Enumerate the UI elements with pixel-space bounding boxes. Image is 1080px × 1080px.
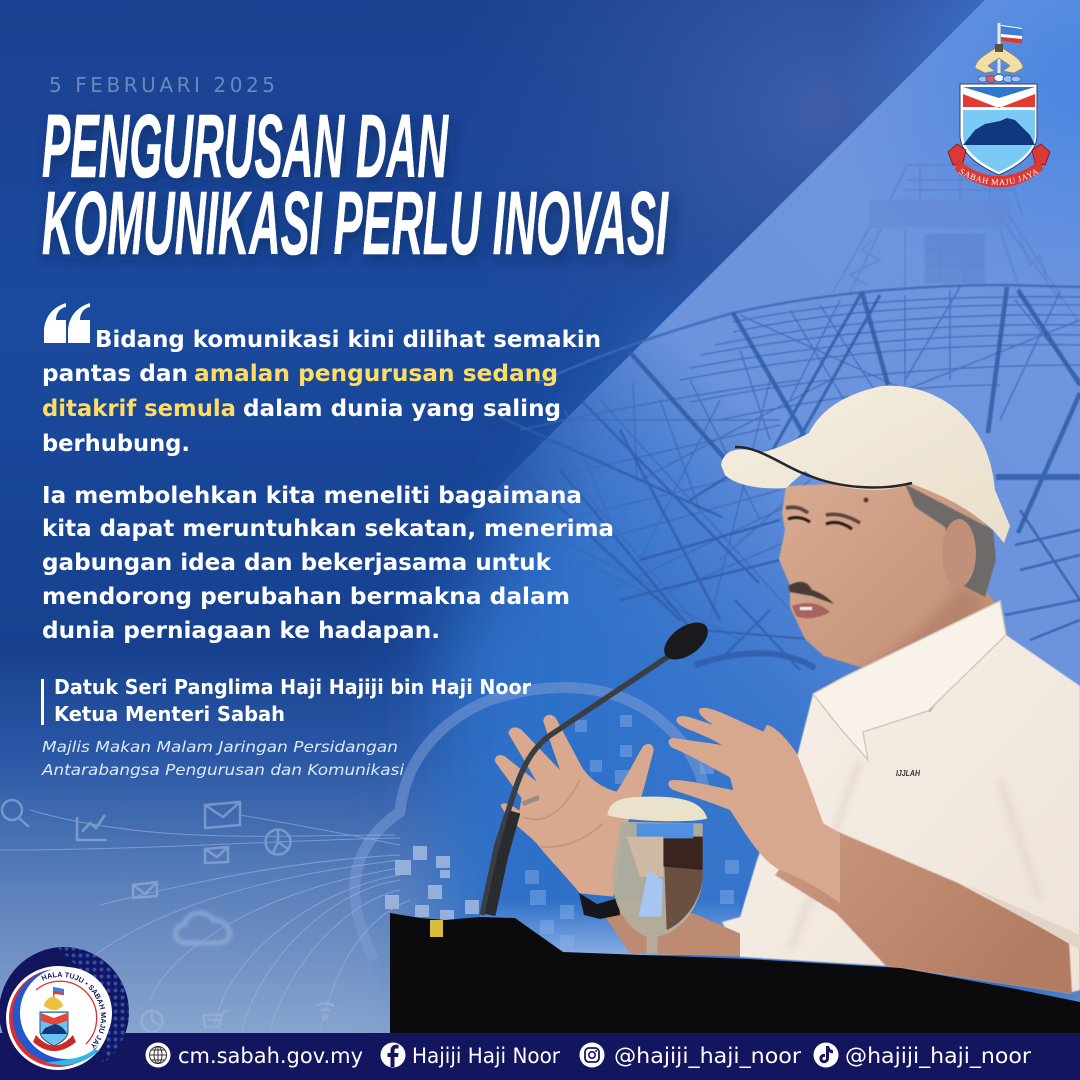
eyes, brow, moustache, mouth xyxy=(786,498,868,618)
quote paragraph two: kita dapat meruntuhkan sekatan, menerima xyxy=(42,516,614,542)
ear xyxy=(942,519,976,587)
shirt folds xyxy=(790,760,1040,950)
cap piping xyxy=(735,447,912,487)
faint icons and network lines bottom left xyxy=(0,800,410,1032)
quote paragraph one: ditakrif semula xyxy=(42,396,236,422)
icon: facebook xyxy=(380,1042,406,1068)
icon: tiktok xyxy=(814,1042,838,1068)
ring xyxy=(522,795,539,806)
shirt print: IJJLAH xyxy=(896,768,921,778)
quote paragraph one: berhubung. xyxy=(42,431,190,457)
tiktok handle: @hajiji_haji_noor xyxy=(845,1044,1031,1069)
instagram handle: @hajiji_haji_noor xyxy=(614,1044,801,1069)
crest: Sabah coat of arms: SABAH MAJU JAYA xyxy=(959,168,1039,186)
title: PENGURUSAN DAN xyxy=(42,97,449,197)
attribution xyxy=(41,675,531,726)
icon: instagram xyxy=(580,1042,604,1068)
face shading xyxy=(860,585,985,700)
cap xyxy=(721,386,1010,543)
hair xyxy=(905,484,996,597)
shirt xyxy=(722,601,1080,993)
forearm xyxy=(775,822,1072,994)
website: cm.sabah.gov.my xyxy=(178,1044,363,1068)
quote paragraph two: mendorong perubahan bermakna dalam xyxy=(42,584,570,610)
quote paragraph one: amalan pengurusan sedang xyxy=(194,361,558,387)
right hand xyxy=(668,708,840,903)
quote paragraph two: gabungan idea dan bekerjasama untuk xyxy=(42,550,552,576)
left hand xyxy=(495,715,654,897)
title xyxy=(42,97,669,274)
arm behind glass xyxy=(605,897,740,957)
attribution: Datuk Seri Panglima Haji Hajiji bin Haji Noor xyxy=(54,675,531,699)
event caption: Antarabangsa Pengurusan dan Komunikasi xyxy=(41,761,405,779)
lectern xyxy=(390,913,1080,1034)
attribution: Ketua Menteri Sabah xyxy=(54,702,285,726)
quote paragraph one xyxy=(42,327,601,457)
crest: Sabah coat of arms xyxy=(948,23,1050,188)
palm lines xyxy=(523,780,603,847)
quote paragraph one: Bidang komunikasi kini dilihat semakin xyxy=(95,327,601,353)
icon: globe xyxy=(146,1042,170,1068)
event caption xyxy=(41,738,405,779)
water glass xyxy=(607,797,707,953)
shirt sleeve hem xyxy=(965,884,1080,950)
collar xyxy=(813,601,1006,760)
date: 5 FEBRUARI 2025 xyxy=(49,73,275,97)
mic base clip xyxy=(430,920,443,937)
tower lattice photo xyxy=(500,165,1080,670)
quote paragraph one: pantas dan xyxy=(42,361,188,387)
photo: speaker xyxy=(390,386,1080,1034)
badge: Hala Tuju Sabah Maju Jaya xyxy=(0,947,129,1070)
icon: quotation mark xyxy=(44,303,90,343)
quote paragraph two: dunia perniagaan ke hadapan. xyxy=(42,618,440,644)
facebook name: Hajiji Haji Noor xyxy=(412,1044,560,1068)
faint cloud and squares graphic xyxy=(355,688,739,960)
quote paragraph two: Ia membolehkan kita meneliti bagaimana xyxy=(42,483,582,509)
footer bar xyxy=(0,1033,1080,1080)
neck and face xyxy=(779,480,1003,712)
quote paragraph one: dalam dunia yang saling xyxy=(243,396,561,422)
quote paragraph two xyxy=(42,483,614,644)
microphone xyxy=(482,615,714,915)
watch xyxy=(579,893,620,919)
event caption: Majlis Makan Malam Jaringan Persidangan xyxy=(42,738,398,756)
